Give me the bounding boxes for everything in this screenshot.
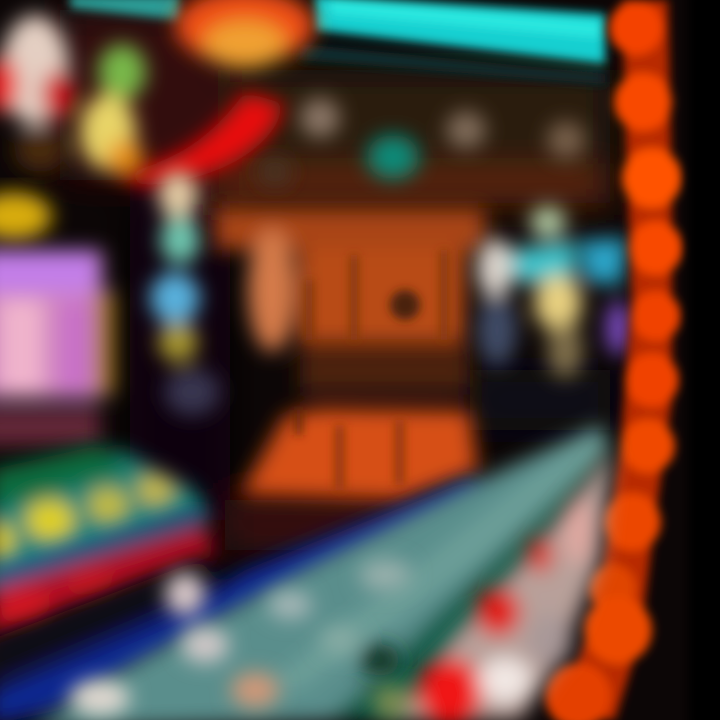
bead light column <box>545 0 683 720</box>
pink machine screen <box>0 250 114 446</box>
orange sign <box>215 208 485 500</box>
blue floor band <box>0 480 490 720</box>
red and white checker strip <box>372 450 612 720</box>
ceiling lights <box>259 98 585 186</box>
central column of lights <box>150 171 220 416</box>
long green counter <box>30 425 610 720</box>
left teal game panel <box>0 445 205 590</box>
figures right of sign <box>477 206 630 378</box>
black right edge <box>688 0 720 720</box>
top left figures <box>0 15 146 176</box>
top orange lamp <box>175 0 315 68</box>
chips on counter <box>70 559 411 716</box>
left red band <box>0 507 215 640</box>
yellow sign left <box>0 192 52 240</box>
top teal and cyan light bars <box>70 0 605 84</box>
sign dark details <box>295 250 448 490</box>
background: dark wall <box>60 10 610 550</box>
red swoosh <box>120 92 284 186</box>
